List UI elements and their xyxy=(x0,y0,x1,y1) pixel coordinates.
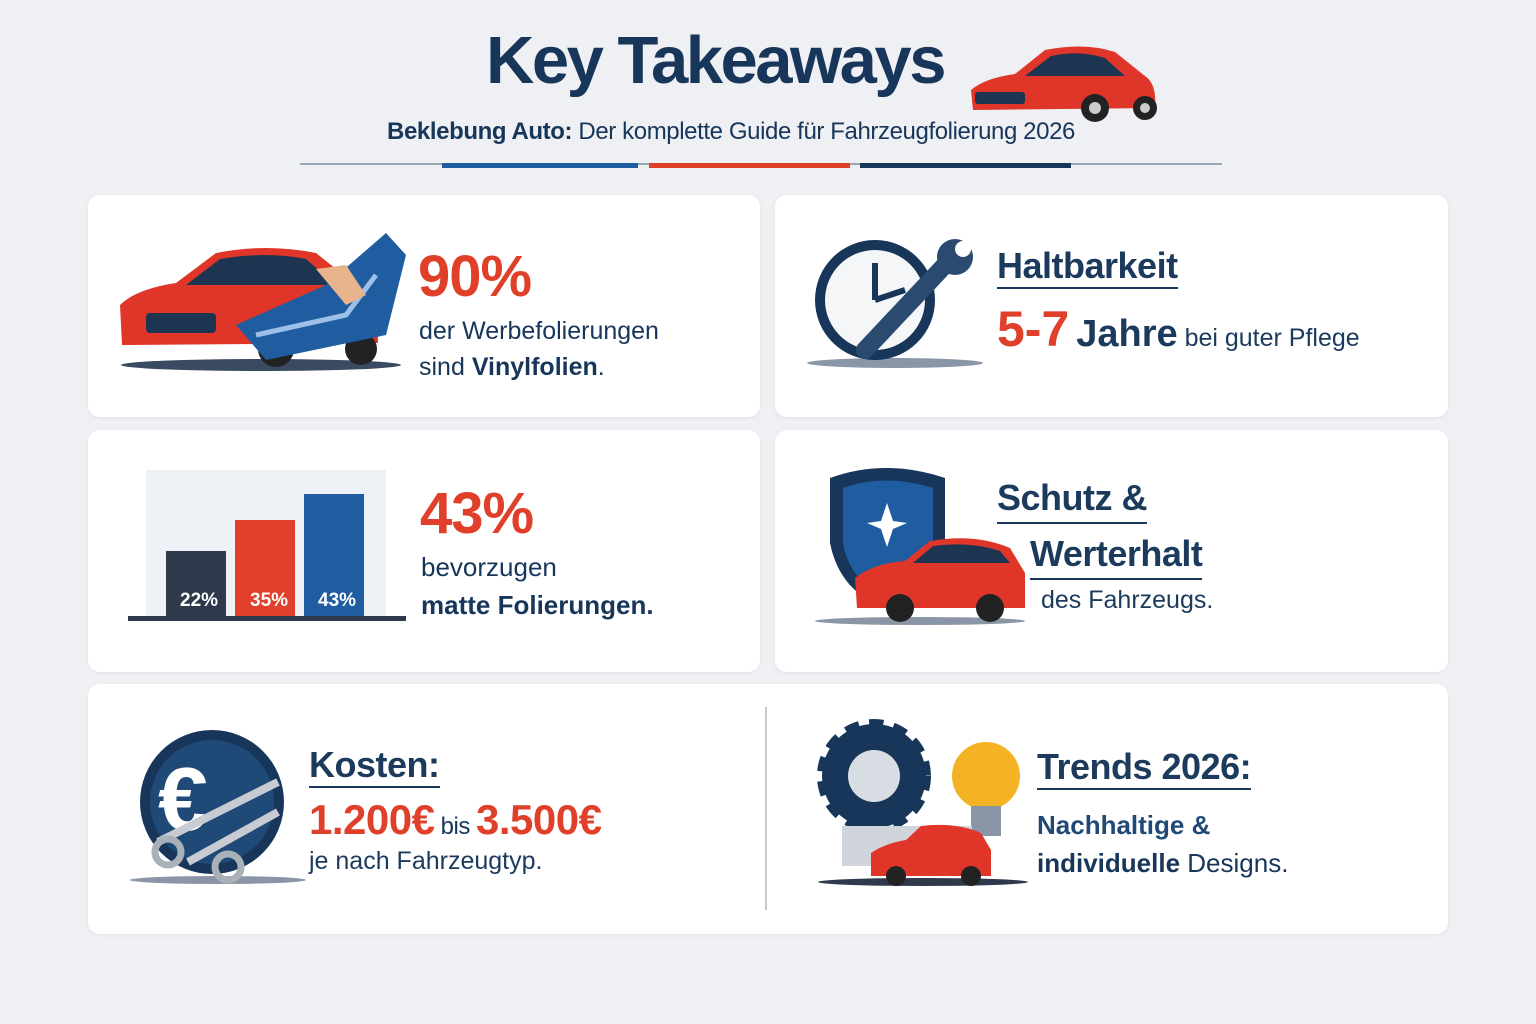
icon: euro xyxy=(130,730,306,884)
heading: Haltbarkeit: Haltbarkeit xyxy=(997,245,1178,286)
text: matte: bevorzugen xyxy=(421,552,557,582)
text: je nach: je nach Fahrzeugtyp. xyxy=(309,847,542,875)
icon: car wrap xyxy=(120,233,406,371)
text: des Fahrzeugs: des Fahrzeugs. xyxy=(1041,586,1213,614)
text: vinyl: der Werbefolierungen xyxy=(419,317,659,345)
title: Key Takeaways xyxy=(486,23,944,98)
panel: matte xyxy=(88,430,760,672)
panel: costs and trends xyxy=(88,684,1448,934)
chart: bars: 35% xyxy=(250,590,288,611)
heading: Schutz & Werterhalt: Schutz & xyxy=(997,477,1147,518)
panel: vinyl xyxy=(88,195,760,417)
text: trends: individuelle Designs. xyxy=(1037,848,1288,878)
heading: Trends: Trends 2026: xyxy=(1037,746,1251,787)
chart: bars: 43% xyxy=(318,590,356,611)
heading: Schutz & Werterhalt xyxy=(997,477,1202,580)
text: vinyl: sind Vinylfolien. xyxy=(419,353,605,381)
text: trends: Nachhaltige & xyxy=(1037,810,1210,840)
subtitle: Beklebung Auto: Der komplette Guide für Fahrzeugfolierung 2026 xyxy=(387,118,1075,145)
panel: durability xyxy=(775,195,1448,417)
text: vinyl xyxy=(419,317,659,381)
stat: 90%: 90% xyxy=(418,244,531,309)
chart: bars xyxy=(128,470,406,621)
divider lines xyxy=(300,163,1222,165)
text: matte xyxy=(421,552,654,620)
heading: Schutz & Werterhalt: Werterhalt xyxy=(1030,533,1202,574)
stat: 43%: 43% xyxy=(420,481,533,546)
icon: shield car xyxy=(815,468,1025,625)
icon: euro: € xyxy=(158,750,208,850)
text: trends xyxy=(1037,810,1288,878)
icon: title car xyxy=(971,46,1157,122)
heading: Kosten: Kosten: xyxy=(309,744,440,785)
stat: years: 5-7 Jahre bei guter Pflege xyxy=(997,301,1360,357)
text: matte: matte Folierungen. xyxy=(421,590,654,620)
icon: gear bulb car xyxy=(817,719,1028,886)
stat: price range: 1.200€ bis 3.500€ xyxy=(309,796,601,843)
chart: bars: 22% xyxy=(180,590,218,611)
icon: clock wrench xyxy=(807,239,983,368)
panel: protection xyxy=(775,430,1448,672)
